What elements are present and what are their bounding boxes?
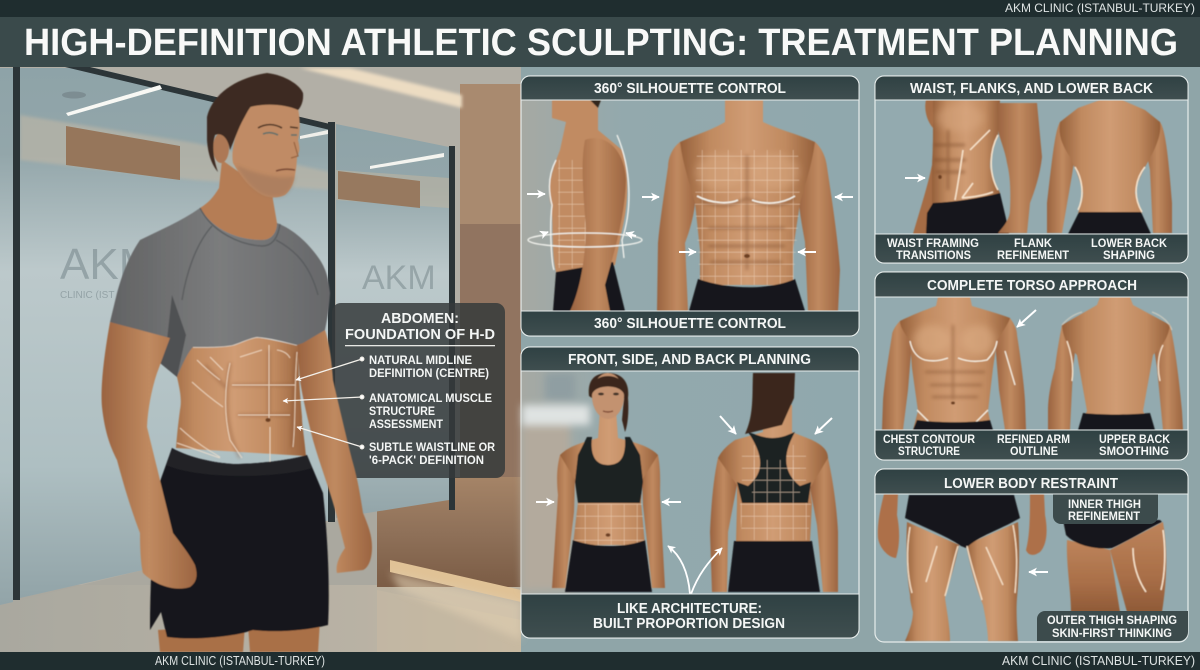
man figure [102, 73, 372, 652]
back torso [1047, 100, 1172, 234]
panel: front, side, back planning [521, 347, 859, 638]
leader lines [283, 357, 364, 449]
panel heading [875, 272, 1188, 297]
outer thigh label [1037, 611, 1188, 641]
callout items: STRUCTURE [369, 404, 435, 418]
panel captions: SHAPING [1103, 248, 1155, 262]
footer strip [0, 652, 1200, 670]
frosted logo, large: AKM [60, 240, 155, 289]
panel: lower body restraint [875, 469, 1188, 642]
panel captions: SMOOTHING [1099, 444, 1169, 458]
side view arrows [527, 194, 636, 236]
panel heading: 360° SILHOUETTE CONTROL [594, 81, 786, 97]
t-shirt [110, 208, 330, 377]
callout: abdomen foundation [283, 310, 495, 467]
callout items: ANATOMICAL MUSCLE [369, 391, 492, 405]
panel: 360 silhouette control [521, 76, 859, 336]
front view arrows [642, 197, 853, 252]
arm arrow [1017, 310, 1036, 327]
panel captions: UPPER BACK [1099, 432, 1170, 446]
title banner: HIGH-DEFINITION ATHLETIC SCULPTING: TREATMENT PLANNING [24, 22, 1178, 64]
abdominal shading [205, 350, 296, 458]
shirt seams [182, 208, 318, 300]
panel: complete torso approach [875, 272, 1188, 460]
callout items: ASSESSMENT [369, 417, 444, 431]
inner thigh label: INNER THIGH [1068, 497, 1141, 511]
callout heading [345, 310, 495, 343]
panel heading: LOWER BODY RESTRAINT [944, 476, 1118, 492]
stubble [236, 165, 295, 197]
panel captions: STRUCTURE [898, 444, 960, 458]
panel heading [521, 347, 859, 371]
navel [265, 418, 271, 422]
top strip [0, 0, 1200, 17]
front three-quarter torso [913, 100, 1042, 234]
front torso figure [657, 100, 840, 311]
panel captions: LOWER BACK [1091, 236, 1167, 250]
architecture curved arrows [668, 546, 722, 594]
panel heading [875, 76, 1188, 100]
panel: waist, flanks, lower back [875, 76, 1188, 263]
ear [213, 133, 229, 163]
man left arm [102, 322, 197, 589]
callout heading: FOUNDATION OF H-D [345, 326, 495, 343]
panel caption: LIKE ARCHITECTURE: [617, 601, 762, 617]
top strip: AKM CLINIC (ISTANBUL-TURKEY) [1005, 1, 1195, 15]
frosted logo, large: CLINIC (IST [60, 290, 114, 301]
panel captions: WAIST FRAMING [887, 236, 979, 250]
panel caption [521, 311, 859, 336]
callout items: NATURAL MIDLINE [369, 353, 472, 367]
shorts waistband [166, 448, 312, 476]
inner thigh label: REFINEMENT [1068, 509, 1141, 523]
back torso figure [1048, 297, 1183, 430]
panel caption: 360° SILHOUETTE CONTROL [594, 316, 786, 332]
callout items: DEFINITION (CENTRE) [369, 366, 489, 380]
panel captions [875, 430, 1188, 460]
panel caption [521, 594, 859, 638]
inner thigh label [1053, 494, 1158, 524]
clinic room scene [0, 67, 521, 652]
blurred room behind woman [522, 373, 590, 590]
callout items [369, 353, 495, 467]
man abdomen [163, 337, 306, 456]
callout heading: ABDOMEN: [381, 310, 459, 327]
side torso figure [528, 100, 642, 311]
callout panel background [332, 303, 505, 478]
footer strip: AKM CLINIC (ISTANBUL-TURKEY) [155, 653, 325, 668]
panel heading: FRONT, SIDE, AND BACK PLANNING [568, 352, 811, 368]
chest torso figure [882, 297, 1026, 430]
hair [589, 373, 628, 432]
thigh arrow [1029, 571, 1048, 573]
hair [207, 73, 303, 172]
panel captions: TRANSITIONS [896, 248, 971, 262]
panel captions: CHEST CONTOUR [883, 432, 975, 446]
man face [232, 100, 300, 197]
callout items: SUBTLE WAISTLINE OR [369, 440, 495, 454]
man right arm [297, 330, 372, 573]
woman back arrows [720, 416, 832, 434]
facial features [258, 125, 298, 171]
panel captions: REFINEMENT [997, 248, 1070, 262]
panel heading [521, 76, 859, 100]
outer thigh label: SKIN-FIRST THINKING [1052, 626, 1172, 640]
frosted logo, small: AKM [362, 259, 436, 297]
outer thigh label: OUTER THIGH SHAPING [1047, 613, 1177, 627]
waist arrow [905, 177, 925, 179]
abdominal guide lines [177, 337, 297, 463]
panel captions: FLANK [1014, 236, 1052, 250]
panel heading [875, 469, 1188, 494]
front legs figure [878, 494, 1047, 641]
woman front arrows [536, 501, 681, 503]
back legs figure [1063, 520, 1166, 612]
panel captions [875, 234, 1188, 263]
shirt side panel [160, 295, 186, 377]
panel heading: WAIST, FLANKS, AND LOWER BACK [910, 81, 1153, 97]
man neck [200, 160, 277, 240]
panel heading: COMPLETE TORSO APPROACH [927, 278, 1137, 294]
panel captions: REFINED ARM [997, 432, 1070, 446]
panel caption: BUILT PROPORTION DESIGN [593, 616, 785, 632]
black shorts [150, 448, 329, 638]
panel captions: OUTLINE [1010, 444, 1058, 458]
woman front figure [552, 373, 665, 592]
woman back figure [710, 373, 838, 592]
callout items: '6-PACK' DEFINITION [369, 453, 484, 467]
man legs [158, 620, 320, 652]
